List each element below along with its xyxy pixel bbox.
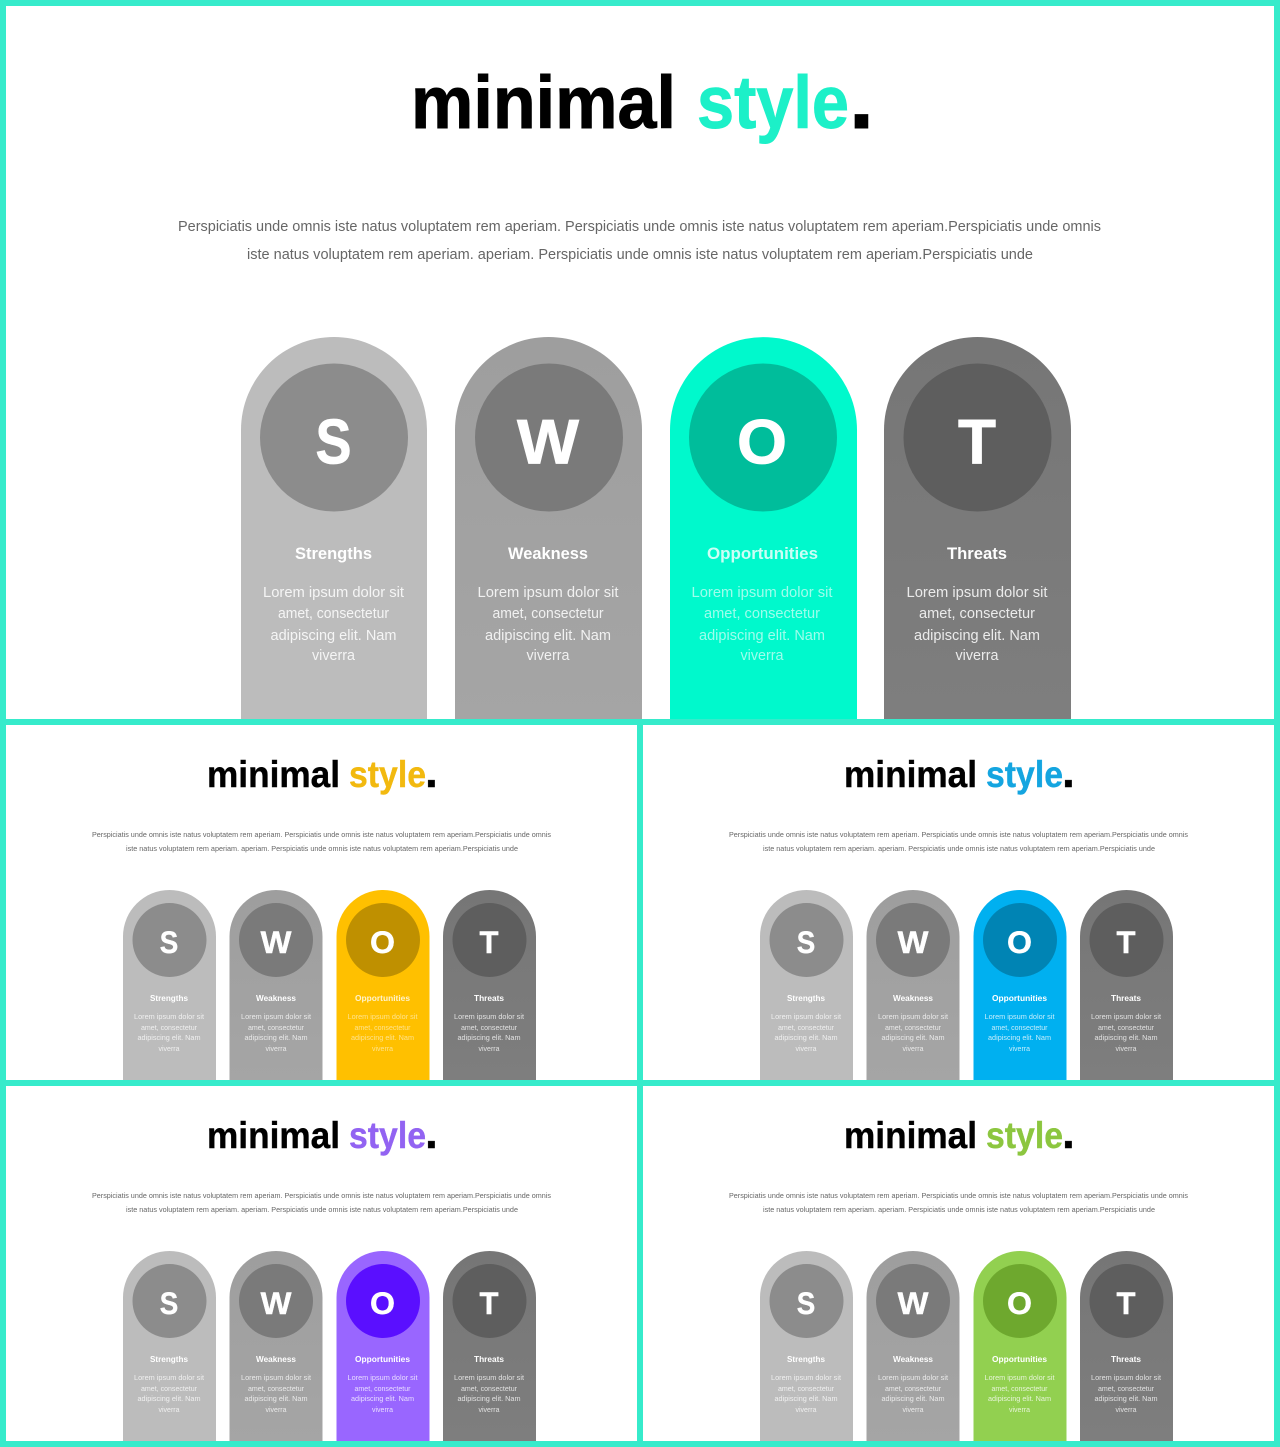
text: Strengths body: viverra [158,1405,180,1414]
title: minimal style. blue: style [986,754,1063,795]
title: minimal style. blue: . [1062,745,1075,797]
icon: T circle: T [1116,1285,1136,1321]
description text: Perspiciatis unde omnis iste natus voluptatem rem aperiam. Perspiciatis unde omnis iste natus voluptatem rem aperiam.Perspiciatis unde omnis [92,830,551,839]
icon: W circle [239,903,313,977]
description text [92,830,551,853]
text: Strengths body [134,1373,205,1414]
text: Opportunities body: viverra [740,647,784,664]
text: Strengths body: adipiscing elit. Nam [774,1394,838,1403]
icon: S circle: S [316,408,352,478]
text: Weakness body: Lorem ipsum dolor sit [241,1012,312,1021]
text: Threats body: amet, consectetur [919,605,1035,622]
text: Threats body [906,584,1048,664]
text: Threats body: viverra [478,1044,500,1053]
text: Weakness body: amet, consectetur [885,1384,941,1393]
text: Weakness body: amet, consectetur [248,1023,304,1032]
text: Strengths body: adipiscing elit. Nam [138,1033,200,1042]
card: Weakness [230,1251,322,1441]
text: Threats body: amet, consectetur [461,1384,517,1393]
text: Opportunities body [692,584,833,664]
text: Threats body: viverra [478,1405,500,1414]
icon: S circle [770,903,844,977]
icon: O circle [346,1264,420,1338]
text: Opportunities body: adipiscing elit. Nam [699,627,825,644]
text: Strengths body: Lorem ipsum dolor sit [134,1373,205,1382]
icon: S circle [770,1264,844,1338]
card: Threats [1080,1251,1173,1441]
text: Strengths body: adipiscing elit. Nam [270,627,396,644]
heading: Strengths: Strengths [150,1354,188,1364]
icon: O circle: O [737,408,787,478]
text: Strengths body: viverra [312,647,356,664]
text: Opportunities body [348,1012,418,1053]
heading: Weakness: Weakness [893,1354,933,1364]
text: Threats body: viverra [956,647,999,664]
card: Opportunities [974,890,1066,1080]
text: Opportunities body: amet, consectetur [992,1384,1048,1393]
text: Strengths body: adipiscing elit. Nam [138,1394,200,1403]
text: Weakness body [878,1373,949,1414]
title: minimal style. yellow: style [349,754,426,795]
icon: T circle [1090,1264,1164,1338]
icon: T circle [452,903,526,977]
description text [729,1191,1188,1214]
heading: Opportunities: Opportunities [992,1354,1047,1364]
text: Strengths body [771,1012,842,1053]
text: Weakness body: viverra [266,1044,287,1053]
text: Opportunities body: viverra [1009,1044,1031,1053]
heading: Strengths: Strengths [787,1354,825,1364]
text: Strengths body [771,1373,842,1414]
icon: W circle: W [898,1285,929,1321]
text: Opportunities body [348,1373,418,1414]
heading: Strengths: Strengths [787,993,825,1003]
description text: iste natus voluptatem rem aperiam. aperiam. Perspiciatis unde omnis iste natus voluptatem rem aperiam.Perspiciatis unde [763,1205,1155,1214]
text: Weakness body [241,1012,312,1053]
heading: Strengths: Strengths [295,544,372,563]
title: minimal style.: . [849,48,874,148]
text: Opportunities body: adipiscing elit. Nam [988,1394,1051,1403]
icon: O circle [983,903,1057,977]
title: minimal style. blue: minimal [844,754,977,795]
text: Threats body: viverra [1116,1405,1137,1414]
text: Weakness body: adipiscing elit. Nam [485,627,611,644]
text: Weakness body: amet, consectetur [885,1023,941,1032]
text: Strengths body: Lorem ipsum dolor sit [263,584,405,601]
description text: Perspiciatis unde omnis iste natus voluptatem rem aperiam. Perspiciatis unde omnis iste natus voluptatem rem aperiam.Perspiciatis unde omnis [729,830,1188,839]
icon: W circle: W [898,924,929,960]
text: Weakness body: adipiscing elit. Nam [882,1033,944,1042]
icon: W circle [876,1264,950,1338]
panel: blue SWOT slide [643,725,1274,1080]
title: minimal style. purple: style [349,1115,426,1156]
text: Strengths body: amet, consectetur [778,1023,834,1032]
text: Opportunities body: Lorem ipsum dolor sit [984,1012,1055,1021]
text: Weakness body: Lorem ipsum dolor sit [241,1373,312,1382]
card: Strengths [123,1251,216,1441]
heading: Threats: Threats [1111,1354,1141,1364]
text: Strengths body [134,1012,205,1053]
text: Strengths body: viverra [796,1044,817,1053]
panel: yellow SWOT slide [6,725,637,1080]
text: Opportunities body: viverra [1009,1405,1031,1414]
title: minimal style.: minimal [411,61,676,144]
text: Weakness body: Lorem ipsum dolor sit [878,1012,949,1021]
icon: W circle [876,903,950,977]
title: minimal style. yellow [207,745,438,797]
text: Strengths body: amet, consectetur [141,1023,197,1032]
text: Opportunities body: viverra [372,1405,394,1414]
text: Opportunities body: Lorem ipsum dolor sit [692,584,833,601]
panel: main teal SWOT slide [6,6,1274,719]
text: Opportunities body: amet, consectetur [704,605,820,622]
text: Threats body: adipiscing elit. Nam [1094,1394,1158,1403]
text: Threats body: Lorem ipsum dolor sit [1091,1373,1162,1382]
card: Weakness [866,1251,960,1441]
icon: W circle: W [517,408,580,478]
text: Opportunities body: Lorem ipsum dolor sit [348,1373,418,1382]
heading: Strengths: Strengths [150,993,188,1003]
text: Threats body [1091,1373,1162,1414]
text: Opportunities body: viverra [372,1044,394,1053]
description text: Perspiciatis unde omnis iste natus voluptatem rem aperiam. Perspiciatis unde omnis iste natus voluptatem rem aperiam.Perspiciatis unde omnis [729,1191,1188,1200]
icon: W circle [475,364,623,512]
text: Strengths body: amet, consectetur [278,605,389,622]
text: Strengths body [263,584,405,664]
text: Opportunities body: amet, consectetur [354,1023,411,1032]
title: minimal style. green: . [1062,1106,1075,1158]
text: Threats body: adipiscing elit. Nam [458,1033,520,1042]
title: minimal style. green: style [986,1115,1063,1156]
text: Opportunities body: adipiscing elit. Nam [988,1033,1051,1042]
icon: S circle: S [160,924,178,960]
heading: Weakness: Weakness [256,1354,296,1364]
description text: Perspiciatis unde omnis iste natus voluptatem rem aperiam. Perspiciatis unde omnis iste natus voluptatem rem aperiam.Perspiciatis unde omnis [92,1191,551,1200]
text: Threats body: Lorem ipsum dolor sit [454,1373,525,1382]
card: Weakness [866,890,960,1080]
card: Opportunities [336,1251,430,1441]
text: Threats body: adipiscing elit. Nam [914,627,1040,644]
heading: Opportunities: Opportunities [707,544,818,563]
card: Weakness [455,337,642,719]
card: Opportunities [974,1251,1066,1441]
text: Weakness body: amet, consectetur [492,605,604,622]
icon: T circle: T [480,924,498,960]
text: Opportunities body: amet, consectetur [354,1384,411,1393]
icon: O circle [689,364,837,512]
card: Strengths [123,890,216,1080]
card: Threats [443,1251,536,1441]
description text [178,218,1101,263]
text: Threats body [454,1012,525,1053]
card: Opportunities [670,337,857,719]
text: Threats body: Lorem ipsum dolor sit [1091,1012,1162,1021]
title: minimal style. purple: . [425,1106,438,1158]
text: Strengths body: Lorem ipsum dolor sit [771,1012,842,1021]
text: Strengths body: Lorem ipsum dolor sit [134,1012,205,1021]
heading: Opportunities: Opportunities [355,993,410,1003]
icon: W circle: W [260,924,292,960]
title: minimal style. purple [207,1106,438,1158]
description text [92,1191,551,1214]
text: Weakness body: amet, consectetur [248,1384,304,1393]
title: minimal style. purple: minimal [207,1115,340,1156]
text: Strengths body: amet, consectetur [778,1384,834,1393]
title: minimal style. yellow: minimal [207,754,340,795]
text: Weakness body [241,1373,312,1414]
card: Strengths [760,890,853,1080]
text: Threats body: adipiscing elit. Nam [458,1394,520,1403]
heading: Threats: Threats [474,993,504,1003]
title: minimal style.: style [697,61,849,144]
card: Strengths [760,1251,853,1441]
description text: iste natus voluptatem rem aperiam. aperiam. Perspiciatis unde omnis iste natus voluptatem rem aperiam.Perspiciatis unde [126,844,518,853]
description text: iste natus voluptatem rem aperiam. aperiam. Perspiciatis unde omnis iste natus voluptatem rem aperiam.Perspiciatis unde [763,844,1155,853]
text: Weakness body [478,584,619,664]
text: Weakness body: viverra [902,1044,924,1053]
text: Threats body: Lorem ipsum dolor sit [906,584,1048,601]
text: Strengths body: viverra [796,1405,817,1414]
panel: green SWOT slide [643,1086,1274,1441]
heading: Weakness: Weakness [893,993,933,1003]
card: Threats [884,337,1071,719]
title: minimal style. yellow: . [425,745,438,797]
text: Opportunities body: adipiscing elit. Nam [351,1033,414,1042]
text: Strengths body: Lorem ipsum dolor sit [771,1373,842,1382]
text: Threats body: adipiscing elit. Nam [1094,1033,1158,1042]
description text: iste natus voluptatem rem aperiam. aperiam. Perspiciatis unde omnis iste natus voluptatem rem aperiam.Perspiciatis unde [126,1205,518,1214]
heading: Opportunities: Opportunities [355,1354,410,1364]
text: Opportunities body: amet, consectetur [992,1023,1048,1032]
text: Weakness body: adipiscing elit. Nam [244,1394,308,1403]
icon: T circle: T [958,408,996,478]
title: minimal style. [411,48,874,148]
text: Weakness body: viverra [902,1405,924,1414]
icon: O circle: O [1007,924,1032,960]
icon: S circle: S [797,1285,815,1321]
title: minimal style. blue [844,745,1075,797]
text: Opportunities body: Lorem ipsum dolor sit [984,1373,1055,1382]
text: Opportunities body: Lorem ipsum dolor sit [348,1012,418,1021]
heading: Threats: Threats [1111,993,1141,1003]
icon: T circle [904,364,1052,512]
text: Opportunities body: adipiscing elit. Nam [351,1394,414,1403]
icon: O circle: O [370,924,395,960]
text: Opportunities body [984,1373,1055,1414]
heading: Weakness: Weakness [256,993,296,1003]
description text [729,830,1188,853]
card: Strengths [241,337,427,719]
text: Strengths body: amet, consectetur [141,1384,197,1393]
icon: W circle [239,1264,313,1338]
icon: S circle: S [797,924,815,960]
text: Threats body: viverra [1116,1044,1137,1053]
text: Threats body [454,1373,525,1414]
icon: T circle [452,1264,526,1338]
card: Weakness [230,890,322,1080]
icon: S circle [132,1264,206,1338]
text: Threats body: Lorem ipsum dolor sit [454,1012,525,1021]
icon: T circle: T [1116,924,1136,960]
icon: O circle [983,1264,1057,1338]
card: Threats [443,890,536,1080]
text: Strengths body: viverra [158,1044,180,1053]
icon: O circle [346,903,420,977]
text: Weakness body: Lorem ipsum dolor sit [478,584,619,601]
heading: Threats: Threats [474,1354,504,1364]
text: Weakness body: adipiscing elit. Nam [244,1033,308,1042]
text: Weakness body: viverra [266,1405,287,1414]
text: Weakness body: adipiscing elit. Nam [882,1394,944,1403]
icon: S circle [260,364,408,512]
text: Threats body [1091,1012,1162,1053]
text: Threats body: amet, consectetur [1098,1023,1154,1032]
icon: S circle: S [160,1285,178,1321]
icon: T circle [1090,903,1164,977]
title: minimal style. green [844,1106,1075,1158]
text: Threats body: amet, consectetur [1098,1384,1154,1393]
description text: Perspiciatis unde omnis iste natus voluptatem rem aperiam. Perspiciatis unde omnis iste natus voluptatem rem aperiam.Perspiciatis unde omnis [178,218,1101,235]
icon: W circle: W [260,1285,292,1321]
text: Weakness body: viverra [526,647,570,664]
text: Weakness body: Lorem ipsum dolor sit [878,1373,949,1382]
heading: Opportunities: Opportunities [992,993,1047,1003]
heading: Threats: Threats [947,544,1007,563]
card: Threats [1080,890,1173,1080]
icon: O circle: O [1007,1285,1032,1321]
panel: purple SWOT slide [6,1086,637,1441]
text: Opportunities body [984,1012,1055,1053]
icon: O circle: O [370,1285,395,1321]
icon: T circle: T [480,1285,498,1321]
text: Strengths body: adipiscing elit. Nam [774,1033,838,1042]
description text: iste natus voluptatem rem aperiam. aperiam. Perspiciatis unde omnis iste natus voluptatem rem aperiam.Perspiciatis unde [247,246,1033,263]
text: Threats body: amet, consectetur [461,1023,517,1032]
icon: S circle [132,903,206,977]
heading: Weakness: Weakness [508,544,588,563]
title: minimal style. green: minimal [844,1115,977,1156]
text: Weakness body [878,1012,949,1053]
card: Opportunities [336,890,430,1080]
